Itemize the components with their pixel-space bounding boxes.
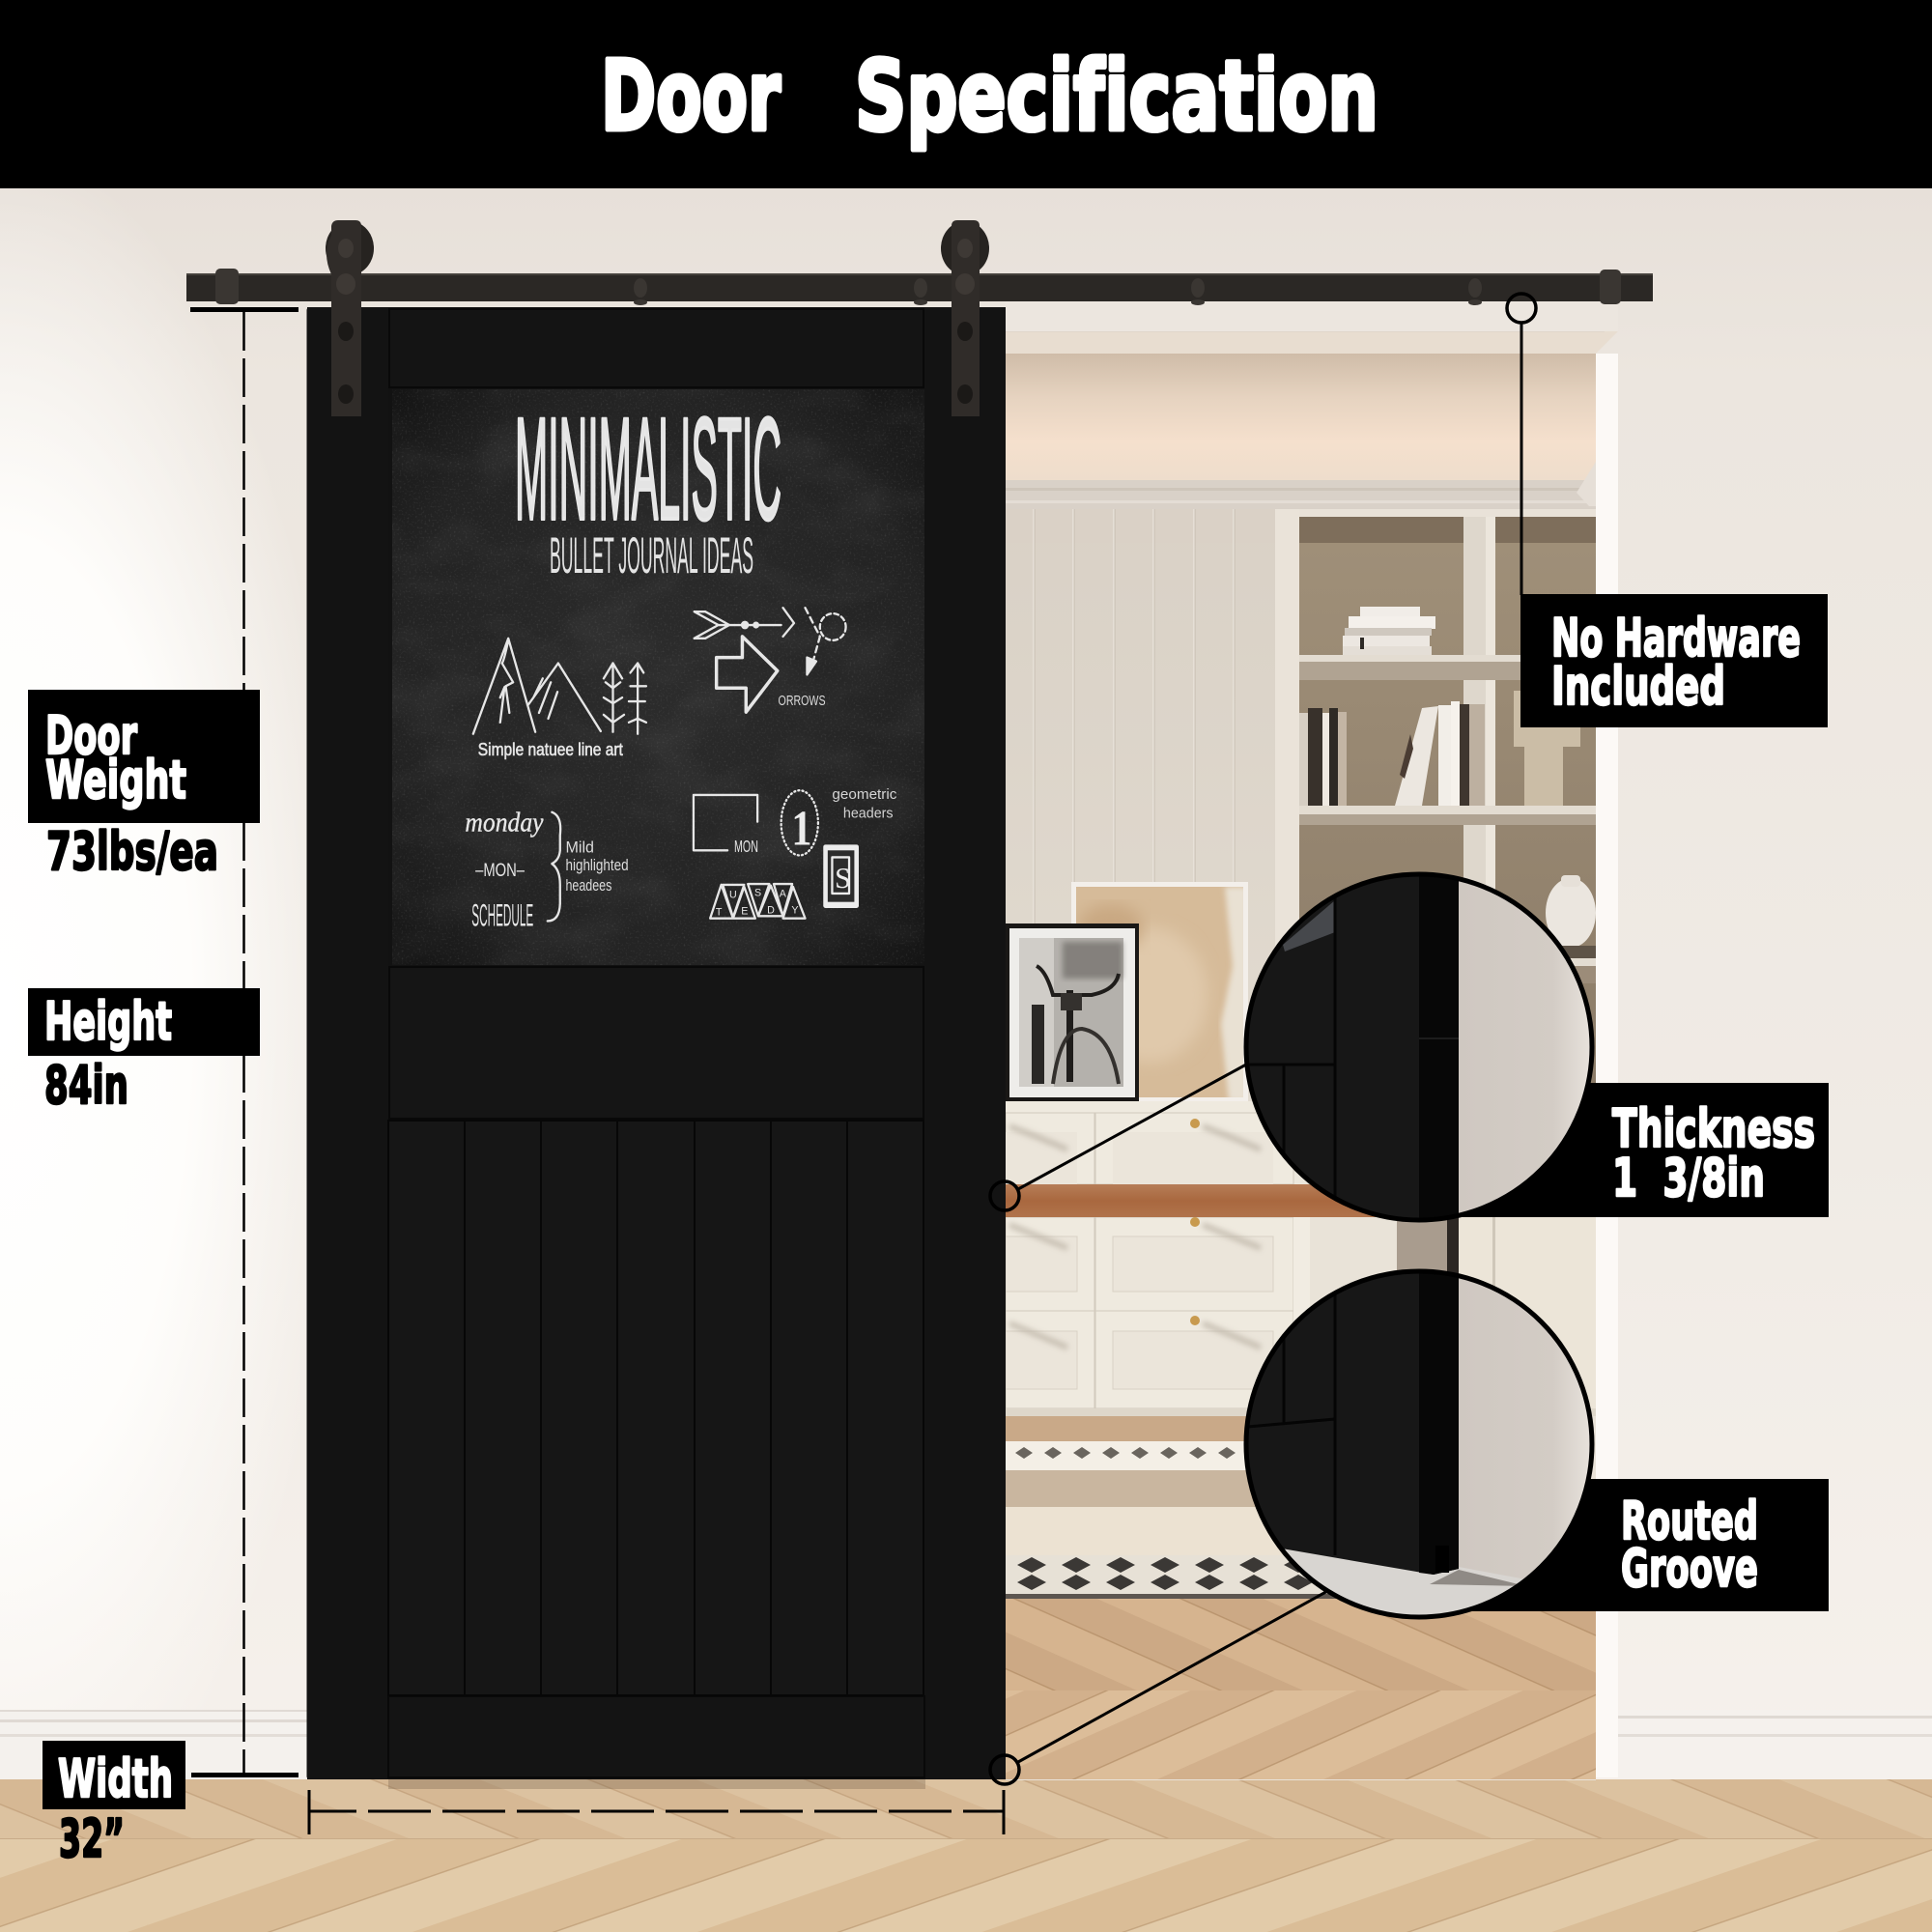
mountains and trees: [473, 639, 646, 759]
stiles: [307, 307, 1006, 1779]
cabinets: [1006, 1113, 1596, 1416]
label: width: [43, 1741, 185, 1869]
pointer ring and line: [990, 1589, 1331, 1784]
callout: thickness: Thickness: [1612, 1098, 1815, 1159]
magnifier: door edge: [1236, 869, 1604, 1227]
label: width: Width: [58, 1748, 173, 1809]
mild highlighted headers: headees: [566, 877, 611, 895]
right hanger: [941, 220, 989, 416]
label: door weight: [28, 690, 260, 882]
callout: no hardware included: Included: [1551, 656, 1725, 717]
callout: no hardware included: [1507, 294, 1828, 727]
title: Specification: [855, 40, 1378, 153]
left hanger: [326, 220, 374, 416]
label: height: [28, 988, 260, 1116]
sliding barn door: [307, 307, 1006, 1779]
magnifier: door bottom: [1236, 1265, 1604, 1623]
geometric headers: 1: [791, 801, 811, 856]
planks: [388, 1121, 923, 1695]
sculpture: [1514, 691, 1580, 806]
end stop right: [1600, 270, 1621, 304]
framed bicycle print: [1006, 923, 1139, 1101]
panelled wall: [1006, 509, 1299, 1108]
mild highlighted headers: Mild: [566, 838, 594, 856]
mild highlighted headers: monday: [465, 808, 544, 838]
art print: tan: [1071, 882, 1248, 1102]
width dimension line: [307, 1790, 1005, 1834]
vase: [1546, 875, 1596, 958]
geometric headers: geometric: [832, 787, 896, 803]
mountains and trees: Simple natuee line art: [478, 740, 623, 759]
shelves: [1299, 655, 1596, 983]
bottom rail: [388, 1696, 924, 1777]
left baseboard: [0, 1710, 307, 1779]
opening with room interior: [1006, 301, 1618, 1780]
callout: thickness: [990, 869, 1829, 1227]
title: [601, 40, 1378, 153]
interior floor and rug: [1006, 1416, 1596, 1779]
middle rail: [389, 967, 923, 1119]
end stop left: [215, 269, 239, 304]
rail bolts: [634, 278, 1482, 305]
geometric headers: S: [754, 888, 761, 899]
bookcase: [1299, 517, 1596, 1116]
chalkboard panel: BULLET JOURNAL IDEAS: [550, 527, 753, 584]
geometric headers: [694, 787, 896, 919]
callout: routed groove: Routed: [1621, 1491, 1758, 1551]
floor: [0, 1779, 1932, 1932]
label: door weight: Door: [45, 705, 137, 766]
book stack: [1343, 607, 1435, 655]
door shadow and opening right trim: [1006, 301, 1618, 1777]
geometric headers: Y: [791, 904, 799, 917]
mild highlighted headers: –MON–: [475, 860, 526, 880]
callout: thickness: 1 3/8in: [1612, 1148, 1765, 1208]
counter: [1006, 1101, 1315, 1113]
geometric headers: E: [741, 906, 748, 918]
geometric headers: headers: [843, 806, 894, 822]
crown molding: [1006, 462, 1596, 509]
callout: routed groove: [990, 1265, 1829, 1784]
mild highlighted headers: highlighted: [566, 857, 629, 874]
label: door weight: 73lbs/ea: [46, 821, 218, 882]
chalkboard panel: [392, 387, 924, 965]
geometric headers: D: [767, 904, 775, 917]
geometric headers: T: [716, 906, 723, 919]
chalk heading: [515, 387, 781, 584]
mild highlighted headers: SCHEDULE: [471, 897, 533, 933]
geometric headers: U: [729, 890, 737, 901]
label: height: Height: [44, 991, 172, 1052]
wood shelf: [1006, 1184, 1411, 1217]
top rail: [389, 309, 923, 387]
geometric headers: MON: [734, 838, 758, 856]
right baseboard: [1618, 1710, 1932, 1779]
geometric headers: S: [835, 862, 851, 895]
header bar: [0, 0, 1932, 188]
upright books left: [1299, 708, 1347, 806]
upright books right: [1395, 701, 1485, 806]
label: width: 32”: [59, 1808, 125, 1869]
sliding barn door: MINIMALISTIC: [515, 387, 781, 550]
barn door track rail: [186, 269, 1653, 305]
soffit: [1006, 331, 1596, 354]
mild highlighted headers: [465, 808, 629, 933]
arrows: [695, 608, 846, 712]
callout: no hardware included: No Hardware: [1551, 608, 1801, 668]
chalk doodles in zoom coordinates: [465, 608, 896, 933]
title: Door: [601, 40, 781, 153]
arrows: ORROWS: [779, 694, 826, 709]
ceiling glow: [1006, 354, 1596, 480]
label: door weight: Weight: [45, 750, 186, 810]
pointer ring and line: [990, 1065, 1246, 1210]
callout: routed groove: Groove: [1621, 1538, 1758, 1599]
geometric headers: A: [780, 888, 787, 900]
pointer ring and line: [1507, 294, 1536, 595]
label: height: 84in: [44, 1055, 128, 1116]
height dimension line: [190, 307, 298, 1777]
